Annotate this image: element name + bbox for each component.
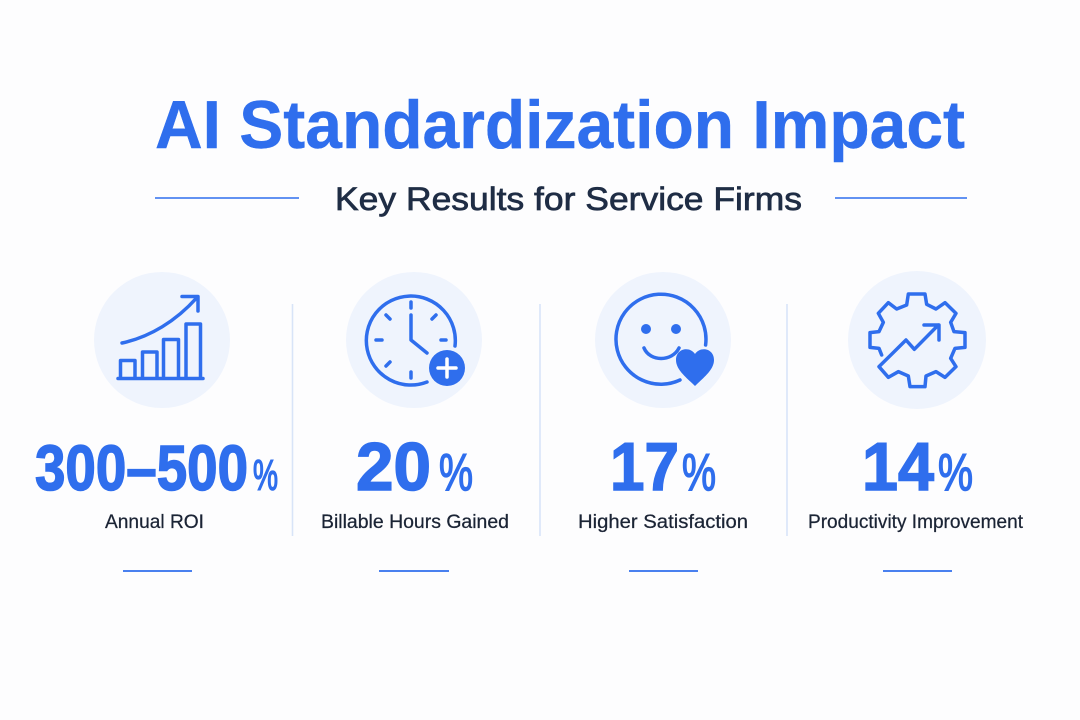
panel: annual ROI bbox=[35, 272, 278, 571]
icon: clock with plus bbox=[346, 272, 482, 408]
icon: rising bar chart bbox=[94, 272, 230, 408]
value: % bbox=[439, 444, 473, 502]
panel: productivity bbox=[808, 271, 1024, 571]
value bbox=[356, 429, 473, 505]
label: Billable Hours Gained bbox=[321, 511, 509, 533]
label: Higher Satisfaction bbox=[578, 511, 748, 533]
value: % bbox=[938, 444, 973, 502]
subtitle text: Key Results for Service Firms bbox=[335, 181, 802, 217]
value: 17 bbox=[610, 429, 679, 505]
icon: smiley with heart bbox=[595, 272, 731, 408]
value: 300–500 bbox=[35, 432, 248, 504]
panel: satisfaction bbox=[578, 272, 748, 571]
label: Annual ROI bbox=[105, 511, 204, 533]
title: AI Standardization Impact bbox=[155, 87, 965, 163]
label: Productivity Improvement bbox=[808, 511, 1024, 533]
value: % bbox=[682, 444, 716, 502]
value: 14 bbox=[862, 429, 934, 505]
value bbox=[862, 429, 973, 505]
value: % bbox=[253, 452, 278, 500]
value: 20 bbox=[356, 429, 431, 505]
icon: gear with trend arrow bbox=[848, 271, 986, 409]
panel: billable hours bbox=[321, 272, 509, 571]
